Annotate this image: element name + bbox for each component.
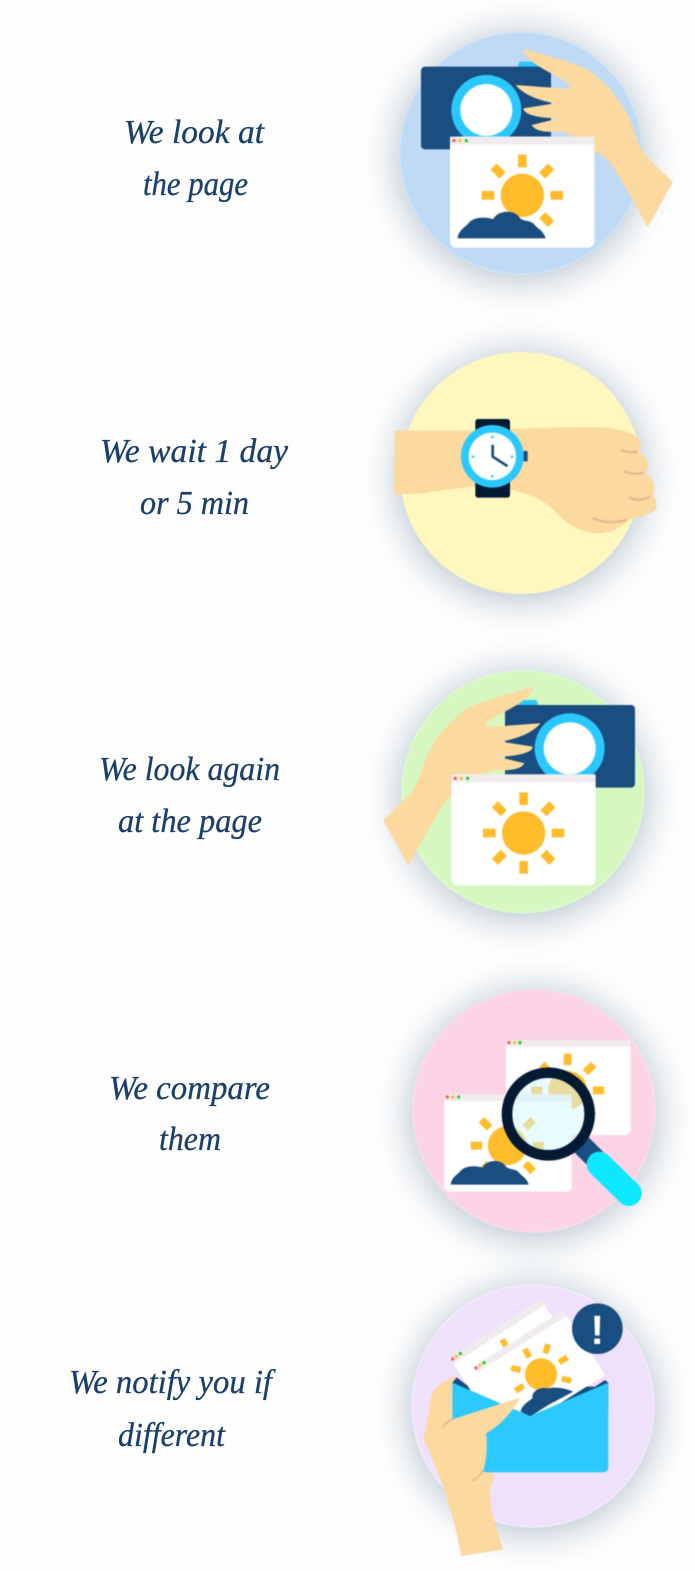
step 3 label: We look again bbox=[99, 751, 280, 788]
badge: exclamation alert: ! bbox=[591, 1307, 604, 1353]
step 3 label bbox=[99, 751, 280, 840]
step 4 label bbox=[109, 1070, 270, 1158]
step 5 label bbox=[69, 1364, 276, 1454]
step 1 label bbox=[124, 114, 266, 203]
illustration: hand photographs a page bbox=[396, 32, 673, 282]
step 5 label: We notify you if bbox=[69, 1364, 276, 1401]
step 4 label: We compare bbox=[109, 1070, 270, 1107]
step 2 label: or 5 min bbox=[140, 485, 249, 522]
step 2 label bbox=[100, 433, 289, 522]
step 1 label: the page bbox=[143, 166, 248, 203]
illustration: magnifying glass over two pages bbox=[409, 990, 659, 1240]
step 2 label: We wait 1 day bbox=[100, 433, 289, 470]
step 4 label: them bbox=[159, 1121, 221, 1158]
step 1 label: We look at bbox=[124, 114, 266, 151]
badge: exclamation alert bbox=[572, 1303, 623, 1354]
step 3 label: at the page bbox=[118, 803, 262, 840]
illustration: wristwatch bbox=[394, 352, 656, 602]
illustration: hand photographs the page again bbox=[383, 671, 648, 921]
step 5 label: different bbox=[118, 1417, 226, 1454]
illustration: envelope notification held by a hand bbox=[408, 1285, 658, 1556]
